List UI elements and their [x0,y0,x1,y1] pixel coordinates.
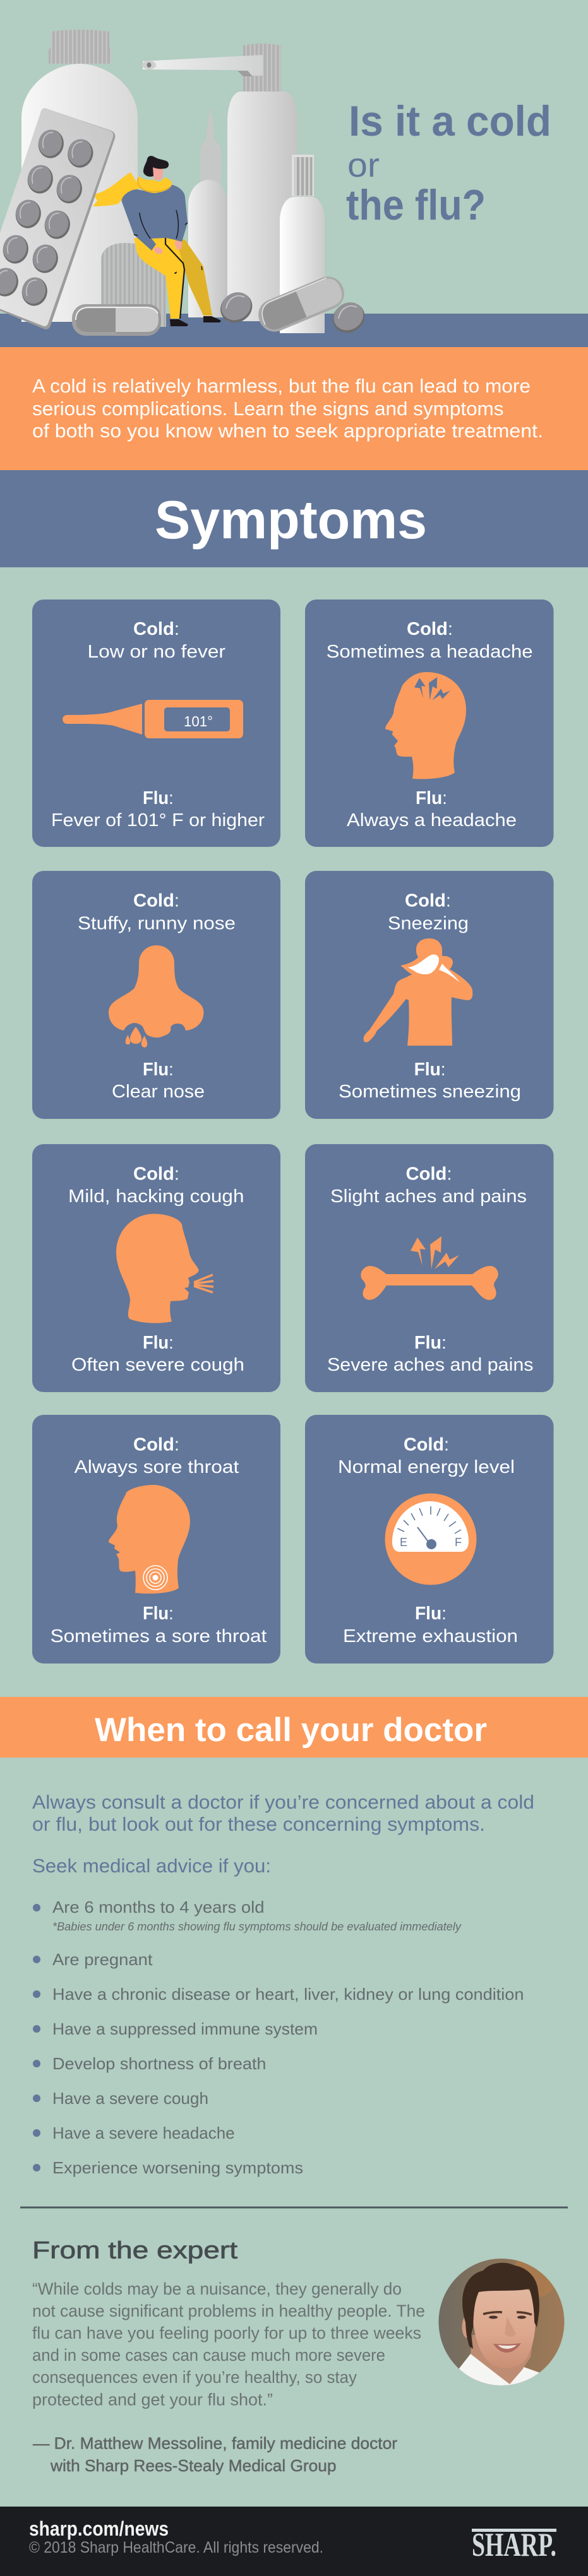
list: concerning symptoms: Experience worsening symptoms [52,2158,303,2177]
attribution [33,2433,397,2475]
panel: headache: Sometimes a headache [327,642,533,662]
panel: headache: Cold: [407,619,453,639]
small right bottle [280,155,325,333]
title: or [347,146,380,184]
icon: runny nose [109,945,203,1048]
capsule left [72,304,161,336]
panel: sneezing: Sneezing [388,914,469,934]
list: concerning symptoms: Develop shortness of breath [52,2054,267,2073]
intro panel [0,347,588,470]
quote: and in some cases can cause much more severe [32,2346,385,2365]
icon: head with sore throat [109,1485,190,1593]
blister pack [0,109,115,329]
panel: fever: Flu: [143,788,174,808]
list: concerning symptoms: Are pregnant [52,1950,153,1969]
text: when to call intro: Seek medical advice if you: [32,1855,271,1877]
icon: thermometer: 101° [184,713,213,730]
panel: sneezing: Flu: [414,1060,446,1080]
panel: nose: Flu: [143,1060,174,1080]
icon: coughing head [116,1214,213,1323]
spray bottle [142,44,297,321]
pill [212,284,261,331]
list: concerning symptoms [33,1898,524,2177]
pill [324,294,374,341]
panel: nose: Stuffy, runny nose [78,914,236,934]
list: concerning symptoms: Have a severe headache [52,2124,235,2142]
icon: fuel gauge: F [455,1536,462,1549]
text: when to call intro [32,1791,534,1877]
heading: from the expert: From the expert [32,2238,238,2264]
icon: fuel gauge: E [400,1536,407,1549]
panel: sneezing: Cold: [405,891,451,911]
title: Is it a cold [349,97,551,145]
panel: aches: Severe aches and pains [327,1355,533,1375]
panel: fever [32,600,280,847]
icon: fuel gauge [385,1493,476,1585]
panel: cough: Often severe cough [71,1355,244,1375]
intro text [32,375,543,442]
list: concerning symptoms: Have a suppressed immune system [52,2019,318,2038]
when to call heading: When to call your doctor [95,1711,487,1749]
panel: headache: Flu: [416,788,447,808]
panel: fever: Cold: [133,619,179,639]
symptoms heading: Symptoms [155,490,427,550]
title [346,97,551,229]
panel: headache: Always a headache [347,810,517,830]
panel: energy [305,1415,553,1663]
when to call heading [0,1697,588,1758]
icon: thermometer [63,700,243,738]
panel: aches [305,1144,553,1392]
panel: aches: Cold: [405,1164,452,1184]
panel: energy: Cold: [404,1435,449,1455]
icon: head with headache [385,672,466,779]
panel: sneezing: Sometimes sneezing [339,1082,521,1102]
intro text: of both so you know when to seek appropriate treatment. [32,420,543,442]
list: concerning symptoms: Are 6 months to 4 years old [52,1898,264,1917]
panel: cough [32,1144,280,1392]
panel: aches: Slight aches and pains [330,1186,527,1207]
panel: cough: Mild, hacking cough [68,1186,244,1207]
quote: protected and get your flu shot.” [32,2390,273,2409]
quote: not cause significant problems in healthy people. The [32,2301,425,2320]
center bottle [188,107,227,317]
panel: nose: Clear nose [112,1082,205,1102]
panel: sore throat: Cold: [133,1435,179,1455]
logo: Sharp: SHARP. [472,2527,556,2563]
list: concerning symptoms: *Babies under 6 months showing flu symptoms should be evaluated immediately [52,1920,462,1933]
figure with scarf [93,156,221,326]
title: the flu? [346,181,486,229]
capsule right [253,272,349,336]
panel: nose [32,871,280,1119]
stacked cap [101,243,166,327]
list: concerning symptoms: Have a severe cough [52,2089,208,2108]
panel: sore throat: Always sore throat [75,1457,239,1477]
quote: consequences even if you’re healthy, so stay [32,2368,357,2387]
footer [0,2507,588,2576]
list: concerning symptoms: Have a chronic disease or heart, liver, kidney or lung condition [52,1985,524,2004]
quote [32,2279,425,2409]
portrait of doctor [438,2259,565,2385]
icon: bone with pain bolts [361,1236,498,1300]
copyright: © 2018 Sharp HealthCare. All rights reserved. [29,2539,323,2556]
quote: flu can have you feeling poorly for up to three weeks [32,2324,421,2343]
panel: headache [305,600,553,847]
panel: sneezing [305,871,553,1119]
panel: fever: Fever of 101° F or higher [51,810,265,830]
quote: “While colds may be a nuisance, they generally do [32,2279,402,2298]
panel: energy: Normal energy level [338,1457,515,1477]
panel: fever: Low or no fever [87,642,225,662]
big bottle [21,30,138,322]
attribution: with Sharp Rees-Stealy Medical Group [50,2456,336,2475]
panel: sore throat: Sometimes a sore throat [51,1626,267,1646]
intro text: serious complications. Learn the signs and symptoms [32,398,503,420]
text: when to call intro: or flu, but look out for these concerning symptoms. [32,1813,485,1835]
source link: sharp.com/news [29,2517,169,2540]
panel: nose: Cold: [133,891,179,911]
intro text: A cold is relatively harmless, but the flu can lead to more [32,375,531,397]
panel: energy: Flu: [415,1604,447,1624]
attribution: — Dr. Matthew Messoline, family medicine doctor [33,2433,397,2452]
panel: energy: Extreme exhaustion [343,1626,518,1646]
panel: cough: Flu: [143,1333,174,1353]
panel: aches: Flu: [414,1333,447,1353]
hero illustration [0,30,588,347]
symptoms heading [0,470,588,567]
icon: sneezing person [363,938,472,1046]
text: when to call intro: Always consult a doctor if you’re concerned about a cold [32,1791,534,1813]
panel: cough: Cold: [133,1164,179,1184]
panel: sore throat [32,1415,280,1663]
panel: sore throat: Flu: [143,1604,174,1624]
